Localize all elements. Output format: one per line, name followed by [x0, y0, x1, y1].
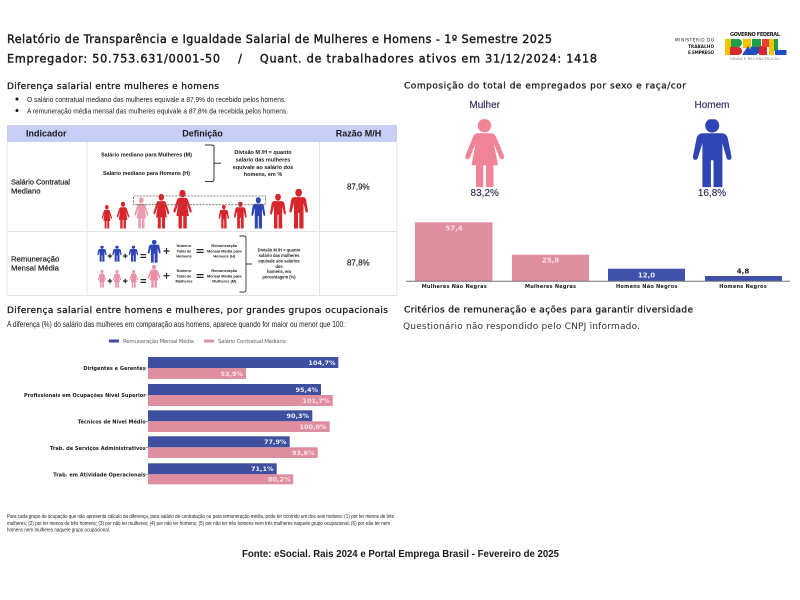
- group: técnicos de nível médio: 90,3%: [286, 412, 309, 420]
- footnote: mulheres; (2) por ter menos de três homens; (3) por não ter mulheres; (4) por não ter homens; (5) por não ter três homens nem três mulheres naquele grupo ocupacional; (6) por não ter nem: [7, 521, 390, 527]
- logo: ministério e governo federal: [675, 32, 786, 61]
- heading: diferença salarial: Diferença salarial entre mulheres e homens: [7, 82, 219, 92]
- row: remuneração mensal média: Mensal Média para: [207, 248, 242, 253]
- bar chart: composição por raça/cor: 57,4: [445, 224, 463, 232]
- bullet list: A remuneração média mensal das mulheres equivale a 87,8% da recebida pelos homens.: [27, 106, 288, 116]
- bar chart: composição por raça/cor: [406, 222, 790, 290]
- group: profissionais nível superior: 101,7%: [302, 397, 330, 405]
- subtitle: A diferença (%) do salário das mulheres em comparação aos homens, aparece quando for maior ou menor que 100:: [7, 320, 345, 329]
- source line: Fonte: eSocial. Rais 2024 e Portal Emprega Brasil - Fevereiro de 2025: [242, 548, 559, 560]
- footnote: [7, 514, 394, 534]
- row: remuneração mensal média: salário das mulheres: [259, 253, 300, 258]
- row: remuneração mensal média: Mulheres (M): [212, 278, 237, 283]
- row: remuneração mensal média: Divisão M /H = quanto: [258, 248, 301, 252]
- row: salário contratual mediano: [11, 145, 370, 196]
- row: remuneração mensal média: Total de: [177, 273, 192, 278]
- group: dirigentes e gerentes: [83, 357, 338, 379]
- row: salário contratual mediano: Salário mediano para Mulheres (M): [101, 152, 192, 158]
- group: profissionais nível superior: Profissionais em Ocupações Nível Superior: [24, 392, 146, 399]
- row: salário contratual mediano: Mediano: [11, 186, 40, 196]
- bar chart: composição por raça/cor: Mulheres Negras: [525, 284, 576, 290]
- row: salário contratual mediano: homens, em %: [244, 172, 282, 178]
- table header: [7, 125, 397, 142]
- bar chart: composição por raça/cor: 25,8: [542, 256, 559, 264]
- bar chart: composição por raça/cor: 4,8: [737, 268, 749, 276]
- bar chart: composição por raça/cor: 12,0: [638, 272, 655, 280]
- row: salário contratual mediano: equivale ao salário dos: [233, 165, 293, 171]
- table header: Definição: [182, 128, 223, 138]
- bar chart: composição por raça/cor: Homens Negros: [719, 284, 767, 290]
- logo: ministério e governo federal: UNIÃO E RECONSTRUÇÃO: [730, 56, 780, 61]
- table header: Razão M/H: [336, 128, 381, 138]
- icon: homem 16,8%: 16,8%: [698, 188, 726, 199]
- logo: ministério e governo federal: GOVERNO FEDERAL: [730, 32, 781, 38]
- text: questionário: Questionário não respondido pelo CNPJ informado.: [403, 322, 640, 332]
- bullet list: [16, 95, 288, 116]
- row: salário contratual mediano: Divisão M /H = quanto: [234, 150, 292, 156]
- group: serviços administrativos: 93,6%: [292, 449, 315, 457]
- group: técnicos de nível médio: Técnicos de Nível Médio: [78, 418, 146, 426]
- row: remuneração mensal média: Número: [177, 268, 192, 273]
- icon: mulher 83,2%: 83,2%: [471, 188, 499, 199]
- group: serviços administrativos: [50, 436, 318, 458]
- row: remuneração mensal média: homens, em: [267, 269, 291, 274]
- group: atividade operacionais: Trab. em Atividade Operacionais: [53, 472, 146, 478]
- row: remuneração mensal média: [11, 236, 370, 292]
- row: remuneração mensal média: Homens: [176, 253, 192, 258]
- title: Empregador: 50.753.631/0001-50 / Quant. de trabalhadores ativos em 31/12/2024: 1418: [7, 52, 597, 66]
- title: [7, 33, 597, 66]
- bullet list: O salário contratual mediano das mulheres equivale a 87,9% do recebido pelos homens.: [27, 95, 286, 104]
- row: remuneração mensal média: Remuneração: [211, 268, 238, 273]
- row: remuneração mensal média: Mensal Média para: [207, 273, 242, 278]
- panel: tabela de indicadores: [7, 125, 397, 296]
- logo: ministério e governo federal: MINISTÉRIO DO: [675, 38, 715, 42]
- row: remuneração mensal média: Mensal Média: [11, 264, 60, 272]
- group: dirigentes e gerentes: 104,7%: [308, 359, 336, 367]
- bar chart: grupos ocupacionais: [24, 357, 338, 484]
- icon: mulher 83,2%: Mulher: [469, 100, 501, 111]
- group: técnicos de nível médio: 100,0%: [299, 423, 327, 431]
- group: profissionais nível superior: [24, 384, 333, 406]
- row: remuneração mensal média: Homens (H): [213, 253, 236, 258]
- icon: homem 16,8%: Homem: [694, 100, 730, 111]
- group: serviços administrativos: Trab. de Serviços Administrativos: [50, 446, 146, 452]
- table header: Indicador: [26, 128, 67, 138]
- bar chart: composição por raça/cor: Mulheres Não Negras: [422, 284, 487, 290]
- heading: grandes grupos ocupacionais: Diferença salarial entre homens e mulheres, por grandes grupos ocupacionais: [7, 306, 388, 316]
- row: remuneração mensal média: Mulheres: [175, 278, 193, 283]
- row: remuneração mensal média: equivale aos salários: [258, 258, 300, 264]
- group: atividade operacionais: 71,1%: [251, 465, 274, 473]
- heading: composição: Composição do total de empregados por sexo e raça/cor: [404, 82, 686, 92]
- group: atividade operacionais: [53, 463, 293, 484]
- legend: [109, 338, 287, 345]
- group: serviços administrativos: 77,9%: [264, 438, 287, 446]
- title: Relatório de Transparência e Igualdade Salarial de Mulheres e Homens - 1º Semestre 2025: [7, 33, 552, 46]
- row: salário contratual mediano: salário das mulheres: [236, 158, 290, 164]
- row: salário contratual mediano: 87,9%: [347, 182, 370, 192]
- row: remuneração mensal média: Total de: [177, 248, 192, 253]
- footnote: Para cada grupo de ocupação que não apresenta cálculo da diferença, para salário de contratação ou para remuneração média, pode ter ocorrido um dos seis motivos: (1) por ter menos de três: [7, 514, 394, 520]
- legend: Remuneração Mensal Média: [123, 338, 194, 345]
- row: salário contratual mediano: Salário Contratual: [11, 178, 70, 186]
- row: salário contratual mediano: Salário mediano para Homens (H): [103, 171, 190, 177]
- group: técnicos de nível médio: [78, 410, 330, 432]
- icons: pirâmide salarial por pessoa: [102, 189, 308, 228]
- row: remuneração mensal média: Remuneração: [211, 243, 238, 248]
- footnote: homens nem mulheres naquele grupo ocupacional.: [7, 528, 110, 534]
- logo: ministério e governo federal: E EMPREGO: [688, 50, 714, 55]
- icon: mulher 83,2%: [465, 100, 504, 199]
- heading: critérios: Critérios de remuneração e ações para garantir diversidade: [404, 304, 693, 316]
- group: dirigentes e gerentes: Dirigentes e Gerentes: [83, 366, 146, 372]
- group: atividade operacionais: 80,2%: [268, 476, 291, 484]
- logo: ministério e governo federal: TRABALHO: [688, 44, 714, 49]
- row: remuneração mensal média: porcentagem (%): [262, 275, 296, 280]
- group: profissionais nível superior: 95,4%: [295, 386, 318, 394]
- icon: homem 16,8%: [693, 100, 731, 199]
- row: remuneração mensal média: Remuneração: [11, 254, 59, 264]
- row: remuneração mensal média: dos: [275, 264, 283, 269]
- bar chart: composição por raça/cor: Homens Não Negros: [616, 284, 677, 290]
- row: remuneração mensal média: Número: [177, 243, 192, 248]
- group: dirigentes e gerentes: 53,9%: [220, 370, 243, 378]
- legend: Salário Contratual Mediano: [218, 338, 287, 345]
- row: remuneração mensal média: 87,8%: [347, 258, 370, 268]
